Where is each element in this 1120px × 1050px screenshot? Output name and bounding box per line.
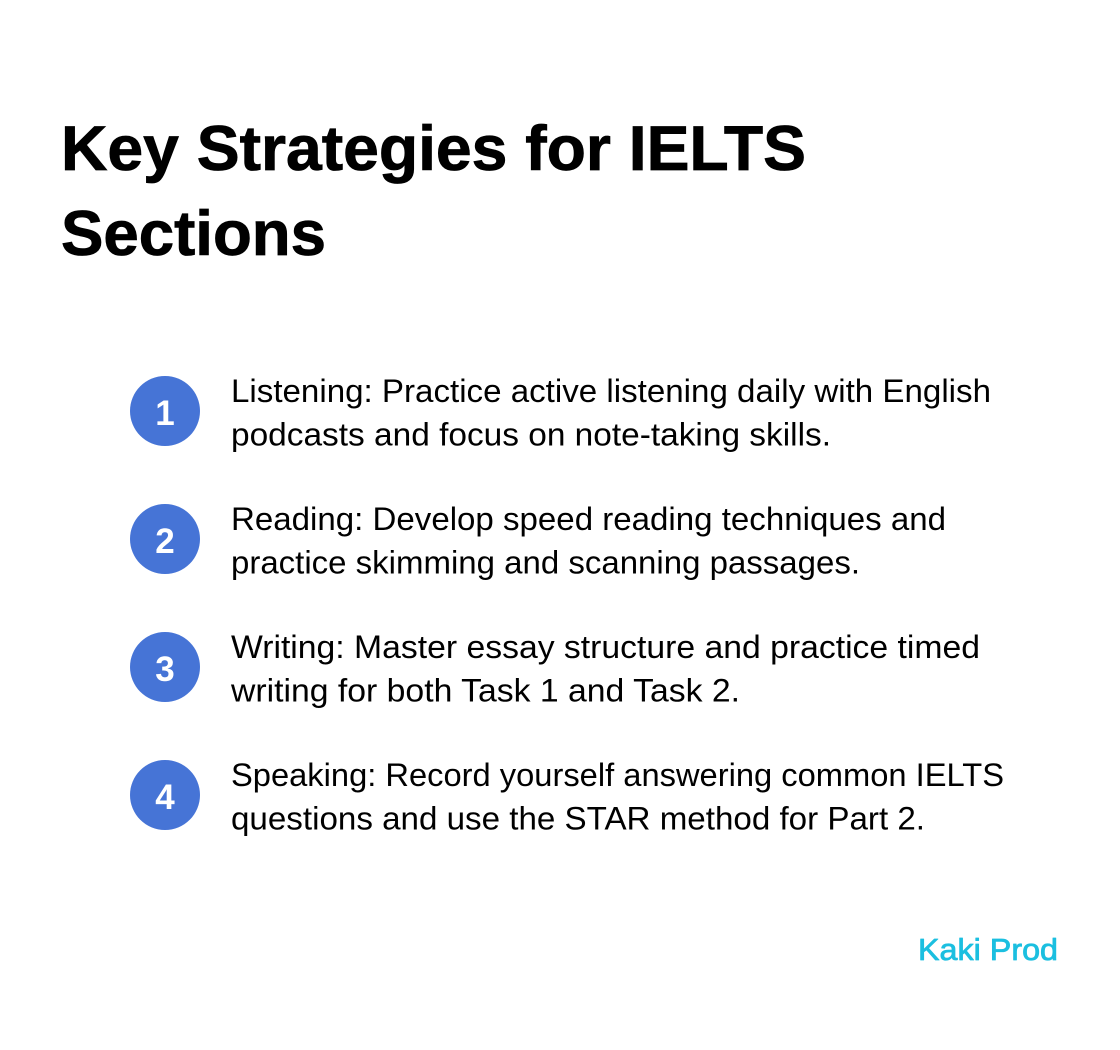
number badge 2: 2 [155,522,175,561]
writing text [230,629,980,708]
strategy 2: reading [130,501,946,580]
speaking text: Speaking: Record yourself answering common IELTS [231,757,1004,793]
listening text: Listening: Practice active listening daily with English [231,373,991,409]
strategy 4: speaking [130,757,1004,836]
number badge 1 [130,376,200,446]
listening text: podcasts and focus on note-taking skills. [231,416,831,452]
number badge 4 [130,760,200,830]
number badge 1: 1 [155,394,175,433]
reading text: Reading: Develop speed reading techniques and [231,501,946,537]
strategy 1: listening [130,373,991,452]
writing text: Writing: Master essay structure and practice timed [231,629,980,665]
speaking text [231,757,1004,836]
list of strategies [130,373,1004,836]
title: Sections [61,199,326,269]
number badge 3 [130,632,200,702]
listening text [231,373,991,452]
number badge 3: 3 [155,650,175,689]
logo: Kaki Prod: Kaki Prod [918,932,1058,967]
number badge 4: 4 [155,778,175,817]
title: Key Strategies for IELTS [61,114,806,184]
writing text: writing for both Task 1 and Task 2. [230,672,740,708]
reading text [231,501,946,580]
reading text: practice skimming and scanning passages. [231,544,860,580]
strategy 3: writing [130,629,980,708]
number badge 2 [130,504,200,574]
speaking text: questions and use the STAR method for Part 2. [231,800,925,836]
title [61,114,806,269]
